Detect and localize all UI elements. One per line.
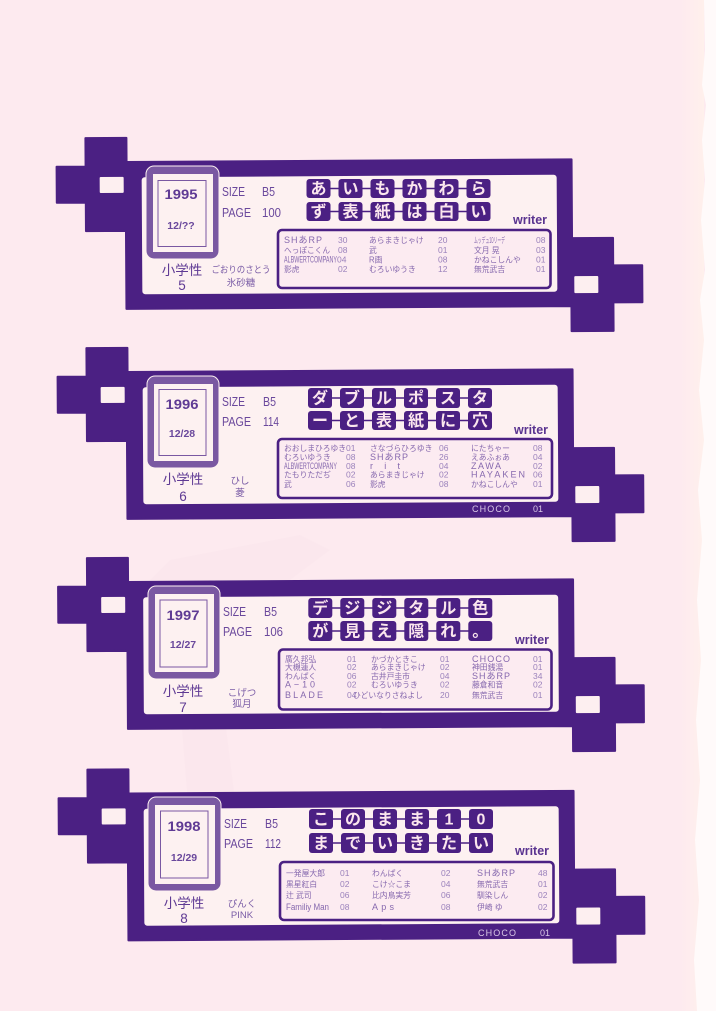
- footer credit: CHOCO: [478, 928, 516, 938]
- writer list: 20: [438, 235, 448, 245]
- writer list: [279, 650, 552, 710]
- writer list: 04: [533, 452, 543, 462]
- writer list: ALBWERTCOMPANY: [284, 461, 337, 471]
- writer list: 08: [346, 461, 356, 471]
- writer list: 02: [338, 264, 348, 274]
- size and page specs: [224, 816, 281, 851]
- writer label: writer: [514, 844, 549, 858]
- writer list: 無荒武吉: [477, 879, 508, 889]
- writer list: 影虎: [370, 479, 386, 489]
- artist name: 菱: [235, 487, 245, 499]
- title blocks: 紙: [374, 203, 391, 221]
- writer list: [280, 862, 554, 920]
- title blocks: [306, 179, 490, 221]
- writer list: 08: [536, 235, 546, 245]
- writer list: 01: [533, 662, 543, 672]
- writer list: 藤倉和音: [472, 680, 503, 690]
- writer list: 48: [538, 868, 548, 878]
- writer list: 08: [439, 479, 449, 489]
- artist name: 氷砂糖: [227, 277, 256, 289]
- writer list: むろいゆうき: [371, 680, 418, 690]
- writer list: Aps: [372, 902, 394, 912]
- writer list: SHあRP: [472, 671, 510, 681]
- publisher and issue number: 小学性: [164, 896, 204, 911]
- writer list: 02: [441, 868, 451, 878]
- faint show-through shapes: [110, 535, 330, 830]
- cover thumbnail: 12/??: [167, 220, 195, 232]
- writer list: 02: [538, 902, 548, 912]
- writer list: 無荒武吉: [472, 690, 503, 700]
- title blocks: 白: [438, 203, 455, 221]
- publisher and issue number: 6: [179, 489, 187, 504]
- size and page specs: [223, 604, 283, 639]
- title blocks: ジ: [376, 600, 392, 618]
- writer list: 02: [439, 470, 449, 480]
- writer list: BLADE: [285, 690, 323, 700]
- size and page specs: [222, 184, 281, 220]
- size and page specs: PAGE: [222, 205, 251, 220]
- title blocks: い: [377, 836, 393, 852]
- writer list: SHあRP: [477, 868, 515, 878]
- writer list: わんぱく: [285, 672, 316, 681]
- writer list: 06: [533, 470, 543, 480]
- writer list: 08: [441, 902, 451, 912]
- title blocks: デ: [312, 598, 328, 618]
- title blocks: ま: [377, 812, 393, 828]
- writer list: A−10: [285, 680, 315, 690]
- title blocks: [308, 388, 492, 430]
- writer list: 04: [347, 690, 357, 700]
- writer list: 古井戸圭市: [371, 671, 410, 681]
- title blocks: た: [441, 834, 457, 852]
- footer credit: [478, 928, 550, 938]
- publisher and issue number: 5: [178, 278, 186, 293]
- writer list: にたちゃー: [471, 444, 510, 453]
- writer list: 廣久邦弘: [285, 654, 316, 664]
- cover thumbnail: 1997: [166, 607, 200, 623]
- writer list: R画: [369, 256, 383, 264]
- publisher and issue number: 7: [179, 700, 187, 715]
- artist name: ごおりのさとう: [212, 264, 270, 276]
- size and page specs: B5: [263, 394, 276, 409]
- writer list: SHあRP: [370, 452, 408, 462]
- panel: 1998 issue: [58, 766, 645, 966]
- writer list: 黒星紅白: [286, 879, 317, 889]
- writer list: 辻 武司: [286, 890, 312, 900]
- artist name: 狐月: [232, 698, 252, 710]
- title blocks: 穴: [472, 411, 488, 430]
- size and page specs: 114: [263, 414, 279, 429]
- writer list: あらまきじゃけ: [371, 663, 426, 672]
- footer credit: CHOCO: [472, 504, 510, 514]
- footer credit: [472, 504, 543, 514]
- title blocks: 色: [472, 598, 488, 618]
- writer list: 大槻蓮人: [285, 662, 316, 672]
- writer list: えあふぉあ: [471, 453, 510, 462]
- writer list: おおしまひろゆき: [284, 444, 346, 453]
- size and page specs: 112: [265, 836, 281, 851]
- cover thumbnail: 1996: [166, 396, 199, 412]
- writer list: 01: [536, 254, 546, 264]
- publisher and issue number: [164, 896, 204, 926]
- title blocks: い: [470, 204, 487, 221]
- title blocks: ら: [470, 180, 487, 198]
- artist name: こげつ: [228, 688, 256, 699]
- panel: 1996 issue: [57, 345, 644, 544]
- writer list: 01: [440, 654, 450, 664]
- writer list: 01: [340, 868, 350, 878]
- cover thumbnail: [147, 376, 219, 468]
- writer list: ムッデュ10リーデ: [474, 235, 505, 245]
- title blocks: 1: [445, 812, 454, 828]
- title blocks: 。: [472, 624, 488, 640]
- paper edge band: [680, 0, 704, 1011]
- writer list: [278, 439, 552, 498]
- size and page specs: PAGE: [224, 836, 253, 851]
- artist name: PINK: [231, 910, 254, 921]
- title blocks: ず: [310, 203, 327, 221]
- writer list: 12: [438, 264, 448, 274]
- title blocks: ル: [376, 390, 392, 408]
- writer list: 06: [441, 890, 451, 900]
- writer list: 06: [340, 890, 350, 900]
- writer label: writer: [514, 633, 549, 647]
- cover thumbnail: 12/27: [170, 639, 196, 651]
- torn right edge: [694, 0, 716, 1011]
- size and page specs: SIZE: [223, 604, 246, 619]
- title blocks: は: [406, 204, 423, 221]
- size and page specs: SIZE: [222, 394, 245, 409]
- writer list: ひどいなりさねよし: [353, 691, 423, 700]
- writer list: 馴染しん: [477, 890, 508, 900]
- artist name: [228, 688, 256, 710]
- writer list: 武: [284, 479, 292, 489]
- title blocks: ル: [440, 600, 456, 618]
- publisher and issue number: 小学性: [163, 472, 203, 487]
- footer credit: 01: [540, 928, 550, 938]
- writer list: 01: [533, 654, 543, 664]
- writer list: 一発屋大郎: [286, 868, 325, 878]
- writer list: 06: [346, 479, 356, 489]
- writer list: 04: [440, 671, 450, 681]
- title blocks: ポ: [408, 390, 424, 408]
- publisher and issue number: 小学性: [162, 263, 202, 278]
- writer list: 01: [533, 479, 543, 489]
- writer list: 08: [438, 254, 448, 264]
- writer list: 34: [533, 671, 543, 681]
- writer list: むろいゆうき: [369, 265, 416, 274]
- writer list: 04: [441, 879, 451, 889]
- writer list: たもりただぢ: [284, 470, 331, 480]
- title blocks: い: [342, 181, 359, 198]
- writer list: 比内鳥実芳: [372, 890, 411, 900]
- writer list: [278, 230, 550, 288]
- cover thumbnail: 12/28: [169, 428, 195, 440]
- title blocks: ダ: [312, 388, 328, 408]
- footer credit: 01: [533, 504, 543, 514]
- writer list: かねこしんや: [471, 480, 518, 489]
- size and page specs: 106: [264, 624, 283, 639]
- writer list: こけ☆こま: [372, 880, 411, 889]
- writer list: CHOCO: [472, 654, 510, 664]
- writer list: へっぽこくん: [284, 246, 330, 255]
- title blocks: か: [406, 180, 423, 198]
- title blocks: ま: [313, 836, 329, 852]
- writer list: かづかときこ: [371, 655, 418, 664]
- title blocks: [308, 598, 492, 641]
- title blocks: 表: [342, 203, 359, 221]
- writer list: 26: [439, 452, 449, 462]
- artist name: [212, 264, 270, 289]
- writer list: 02: [533, 461, 543, 471]
- title blocks: 0: [477, 812, 486, 828]
- size and page specs: SIZE: [224, 816, 247, 831]
- title blocks: れ: [440, 622, 456, 640]
- writer list: ZAWA: [471, 461, 501, 471]
- writer list: 08: [340, 902, 350, 912]
- cover thumbnail: [148, 586, 220, 679]
- writer list: 04: [439, 461, 449, 471]
- writer list: 02: [340, 879, 350, 889]
- writer list: 08: [533, 443, 543, 453]
- title blocks: [309, 809, 493, 853]
- writer list: 01: [538, 879, 548, 889]
- publisher and issue number: 小学性: [163, 684, 203, 699]
- artist name: ひし: [230, 476, 250, 487]
- size and page specs: B5: [264, 604, 277, 619]
- title blocks: 紙: [408, 412, 424, 430]
- writer list: 01: [533, 690, 543, 700]
- writer list: かねこしんや: [474, 256, 521, 264]
- writer list: 08: [338, 245, 348, 255]
- writer list: 01: [346, 443, 356, 453]
- title blocks: あ: [310, 180, 327, 198]
- writer label: writer: [512, 213, 547, 227]
- artist name: [228, 899, 256, 921]
- size and page specs: PAGE: [223, 624, 252, 639]
- writer list: わんぱく: [372, 869, 403, 878]
- publisher and issue number: [163, 684, 203, 715]
- writer list: 06: [439, 443, 449, 453]
- writer list: ALBWERTCOMPANY: [284, 254, 337, 264]
- title blocks: に: [440, 413, 456, 430]
- title blocks: と: [344, 412, 360, 430]
- writer list: 02: [538, 890, 548, 900]
- writer list: Familiy Man: [286, 902, 329, 912]
- writer list: 01: [438, 245, 448, 255]
- title blocks: の: [345, 812, 361, 828]
- title blocks: タ: [472, 390, 488, 408]
- writer list: さなづらひろゆき: [370, 444, 432, 453]
- writer list: 神田銭湯: [472, 662, 503, 672]
- writer list: 02: [346, 470, 356, 480]
- writer label: writer: [513, 423, 548, 437]
- cover thumbnail: 1995: [164, 186, 198, 202]
- publisher and issue number: [162, 263, 202, 293]
- title blocks: も: [374, 180, 391, 198]
- title blocks: が: [312, 622, 328, 640]
- publisher and issue number: [163, 472, 203, 504]
- title blocks: 見: [344, 622, 360, 640]
- writer list: 02: [347, 662, 357, 672]
- size and page specs: B5: [262, 184, 275, 199]
- title blocks: ブ: [344, 388, 360, 408]
- panel: 1997 issue: [58, 555, 644, 754]
- panel: 1995 issue: [56, 135, 643, 334]
- frame shape with side tabs: [58, 766, 645, 966]
- frame shape with side tabs: [57, 345, 644, 544]
- title blocks: 表: [376, 412, 392, 430]
- title blocks: こ: [313, 812, 329, 828]
- title blocks: い: [473, 836, 489, 852]
- title blocks: ス: [440, 390, 456, 408]
- writer list: 04: [337, 254, 347, 264]
- title blocks: 隠: [408, 622, 424, 640]
- writer list: 01: [536, 264, 546, 274]
- cover thumbnail: [148, 797, 221, 891]
- writer list: むろいゆうき: [284, 453, 331, 462]
- writer list: rit: [370, 461, 400, 471]
- writer list: 無荒武吉: [474, 264, 505, 274]
- writer list: 20: [440, 690, 450, 700]
- writer list: 伊崎 ゆ: [477, 902, 503, 912]
- writer list: 03: [536, 245, 546, 255]
- writer list: 08: [346, 452, 356, 462]
- title blocks: わ: [438, 180, 455, 198]
- title blocks: き: [409, 834, 425, 852]
- writer list: HAYAKEN: [471, 470, 525, 480]
- title blocks: ま: [409, 812, 425, 828]
- artist name: ぴんく: [228, 899, 256, 910]
- title blocks: え: [376, 622, 392, 640]
- size and page specs: 100: [262, 205, 281, 220]
- writer list: あらまきじゃけ: [370, 470, 425, 480]
- writer list: 影虎: [284, 264, 300, 274]
- frame shape with side tabs: [56, 135, 643, 334]
- writer list: 02: [533, 680, 543, 690]
- writer list: SHあRP: [284, 235, 322, 245]
- size and page specs: SIZE: [222, 184, 245, 199]
- writer list: 02: [440, 680, 450, 690]
- writer list: 02: [440, 662, 450, 672]
- cover thumbnail: 12/29: [171, 852, 197, 864]
- publisher and issue number: 8: [180, 911, 188, 926]
- title blocks: で: [345, 836, 361, 852]
- writer list: 30: [338, 235, 348, 245]
- writer list: 02: [347, 680, 357, 690]
- size and page specs: B5: [265, 816, 278, 831]
- title blocks: タ: [408, 600, 424, 618]
- title blocks: ジ: [344, 600, 360, 618]
- artist name: [230, 476, 250, 499]
- writer list: 文月 晃: [474, 245, 500, 255]
- size and page specs: PAGE: [222, 414, 251, 429]
- frame shape with side tabs: [58, 555, 644, 754]
- cover thumbnail: [146, 166, 219, 259]
- size and page specs: [222, 394, 279, 429]
- cover thumbnail: 1998: [168, 818, 201, 834]
- writer list: あらまきじゃけ: [369, 236, 424, 245]
- writer list: 武: [369, 245, 377, 255]
- writer list: 01: [347, 654, 357, 664]
- title blocks: ー: [312, 413, 328, 430]
- writer list: 06: [347, 671, 357, 681]
